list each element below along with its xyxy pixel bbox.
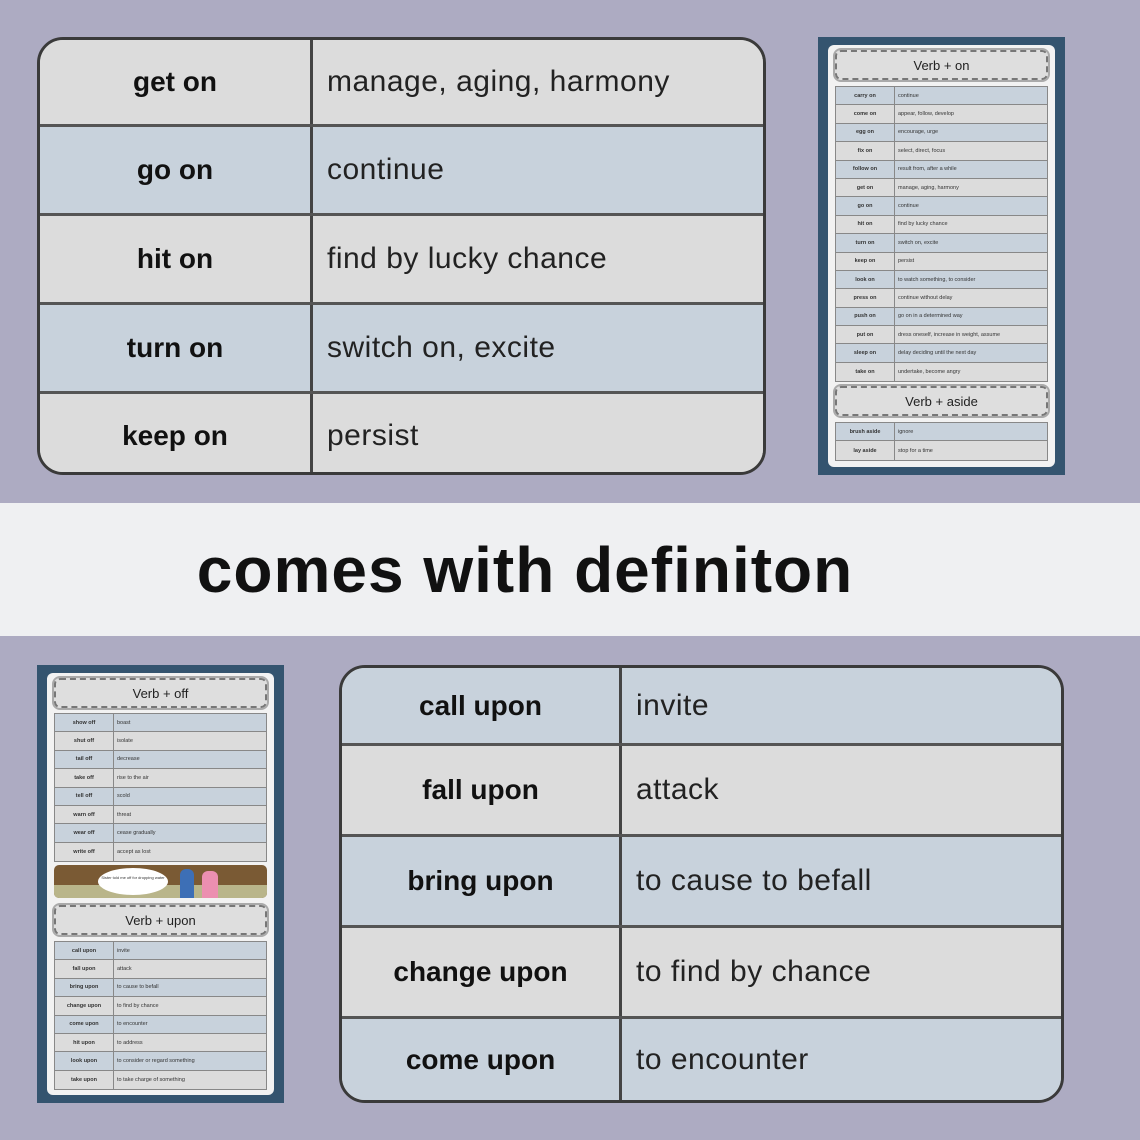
row: get on bbox=[40, 40, 763, 127]
mini table: on: turn on bbox=[856, 240, 874, 246]
mini table: upon: come upon bbox=[69, 1021, 99, 1027]
mini table: off: decrease bbox=[117, 756, 140, 762]
header: Verb + on bbox=[835, 50, 1048, 80]
mini table: upon: change upon bbox=[67, 1003, 101, 1009]
row: call upon: invite bbox=[636, 688, 709, 722]
row: go on: go on bbox=[137, 154, 213, 185]
mini table: aside: ignore bbox=[898, 429, 913, 435]
banner bbox=[0, 503, 1140, 636]
mini table: on: sleep on bbox=[854, 350, 876, 356]
poster: verb + on thumbnail bbox=[818, 37, 1065, 475]
mini table: on: continue bbox=[898, 203, 919, 209]
mini table: on: find by lucky chance bbox=[898, 221, 948, 227]
mini table: upon: to consider or regard something bbox=[117, 1058, 195, 1064]
mini table: off: cease gradually bbox=[117, 830, 156, 836]
mini table: aside: brush aside bbox=[850, 429, 880, 435]
mini table: on: delay deciding until the next day bbox=[898, 350, 976, 356]
mini table: on: go on bbox=[858, 203, 872, 209]
mini table: off: scold bbox=[117, 793, 130, 799]
mini table: upon: bring upon bbox=[70, 984, 98, 990]
row: change upon: change upon bbox=[393, 956, 568, 987]
mini table: on: undertake, become angry bbox=[898, 369, 960, 375]
mini table: upon: to cause to befall bbox=[117, 984, 159, 990]
mini table: on: look on bbox=[855, 277, 875, 283]
header: Verb + upon: Verb + upon bbox=[125, 912, 196, 928]
poster: verb + off / upon thumbnail bbox=[37, 665, 284, 1103]
table: verb + on examples bbox=[37, 37, 766, 475]
mini table: upon: hit upon bbox=[73, 1040, 95, 1046]
mini table: off: wear off bbox=[73, 830, 95, 836]
mini table: upon: to find by chance bbox=[117, 1003, 159, 1009]
illustration: couple scene bbox=[54, 865, 267, 898]
mini table: on: select, direct, focus bbox=[898, 148, 945, 154]
mini table: off: shut off bbox=[74, 738, 94, 744]
mini table: upon: attack bbox=[117, 966, 132, 972]
row: hit on: find by lucky chance bbox=[327, 242, 607, 275]
mini table: upon: look upon bbox=[71, 1058, 97, 1064]
mini table: off: isolate bbox=[117, 738, 133, 744]
header: Verb + on: Verb + on bbox=[913, 58, 970, 72]
mini table: off: tail off bbox=[76, 756, 92, 762]
row: fall upon: fall upon bbox=[422, 774, 539, 805]
row: bring upon: bring upon bbox=[407, 865, 554, 896]
mini table: on: get on bbox=[857, 185, 873, 191]
mini table: upon: to encounter bbox=[117, 1021, 148, 1027]
mini table: aside: stop for a time bbox=[898, 448, 933, 454]
mini table: on: carry on bbox=[854, 93, 876, 99]
row: come upon bbox=[342, 1019, 1061, 1100]
mini table: on: egg on bbox=[856, 129, 874, 135]
mini table: on: fix on bbox=[858, 148, 872, 154]
mini table: off: take off bbox=[74, 775, 94, 781]
mini table: off: show off bbox=[73, 720, 95, 726]
mini table: off: boast bbox=[117, 720, 130, 726]
mini table: on: keep on bbox=[855, 258, 875, 264]
mini table: off: threat bbox=[117, 812, 131, 818]
title: comes with definiton bbox=[197, 534, 853, 606]
mini table: off: write off bbox=[73, 849, 95, 855]
mini table: on: follow on bbox=[853, 166, 877, 172]
mini table: upon: fall upon bbox=[73, 966, 95, 972]
mini table: on: result from, after a while bbox=[898, 166, 957, 172]
mini table: on: push on bbox=[854, 313, 876, 319]
row: keep on: keep on bbox=[122, 420, 228, 451]
mini table: on: hit on bbox=[858, 221, 872, 227]
mini table: aside bbox=[835, 422, 1048, 461]
header: Verb + off bbox=[54, 678, 267, 708]
row: call upon bbox=[342, 668, 1061, 746]
mini table: upon bbox=[54, 941, 267, 1090]
mini table: on: put on bbox=[857, 332, 873, 338]
row: hit on: hit on bbox=[137, 243, 213, 274]
mini table: upon: to take charge of something bbox=[117, 1077, 185, 1083]
mini table: on: appear, follow, develop bbox=[898, 111, 954, 117]
mini table: on: switch on, excite bbox=[898, 240, 938, 246]
mini table: off: warn off bbox=[73, 812, 95, 818]
table: verb + upon examples bbox=[339, 665, 1064, 1103]
illustration: couple scene: Sister told me off for dropping water bbox=[101, 875, 165, 880]
mini table: on: go on in a determined way bbox=[898, 313, 963, 319]
row: go on: continue bbox=[327, 153, 444, 186]
header: Verb + upon bbox=[54, 905, 267, 935]
header: Verb + off: Verb + off bbox=[133, 686, 188, 700]
header: Verb + aside: Verb + aside bbox=[905, 394, 978, 408]
mini table: off: tell off bbox=[76, 793, 92, 799]
mini table: on: persist bbox=[898, 258, 914, 264]
mini table: on: continue without delay bbox=[898, 295, 952, 301]
row: turn on: turn on bbox=[127, 332, 223, 363]
row: come upon: come upon bbox=[406, 1044, 555, 1074]
mini table: upon: take upon bbox=[71, 1077, 97, 1083]
row: change upon: to find by chance bbox=[636, 955, 871, 988]
mini table: off: accept as lost bbox=[117, 849, 151, 855]
mini table: upon: to address bbox=[117, 1040, 143, 1046]
row: hit on bbox=[40, 216, 763, 305]
row: get on: get on bbox=[133, 66, 217, 97]
mini table: on: continue bbox=[898, 93, 919, 99]
mini table: on: come on bbox=[854, 111, 876, 117]
mini table: off: rise to the air bbox=[117, 775, 149, 781]
row: call upon: call upon bbox=[419, 690, 542, 720]
mini table: on: encourage, urge bbox=[898, 129, 938, 135]
mini table: upon: invite bbox=[117, 948, 130, 954]
mini table: on bbox=[835, 86, 1048, 382]
row: keep on bbox=[40, 394, 763, 478]
row: come upon: to encounter bbox=[636, 1042, 809, 1076]
mini table: on: dress oneself, increase in weight, assume bbox=[898, 332, 1000, 338]
mini table: upon: call upon bbox=[72, 948, 96, 954]
row: fall upon: attack bbox=[636, 773, 719, 806]
row: bring upon bbox=[342, 837, 1061, 928]
mini table: on: take on bbox=[855, 369, 875, 375]
mini table: on: press on bbox=[854, 295, 876, 301]
row: turn on bbox=[40, 305, 763, 394]
row: keep on: persist bbox=[327, 419, 419, 452]
mini table: on: to watch something, to consider bbox=[898, 277, 975, 283]
row: turn on: switch on, excite bbox=[327, 331, 556, 364]
row: bring upon: to cause to befall bbox=[636, 864, 872, 897]
mini table: aside: lay aside bbox=[853, 448, 877, 454]
row: get on: manage, aging, harmony bbox=[327, 65, 670, 98]
header: Verb + aside bbox=[835, 386, 1048, 416]
row: fall upon bbox=[342, 746, 1061, 837]
row: change upon bbox=[342, 928, 1061, 1019]
mini table: off bbox=[54, 713, 267, 862]
row: go on bbox=[40, 127, 763, 216]
mini table: on: manage, aging, harmony bbox=[898, 185, 959, 191]
